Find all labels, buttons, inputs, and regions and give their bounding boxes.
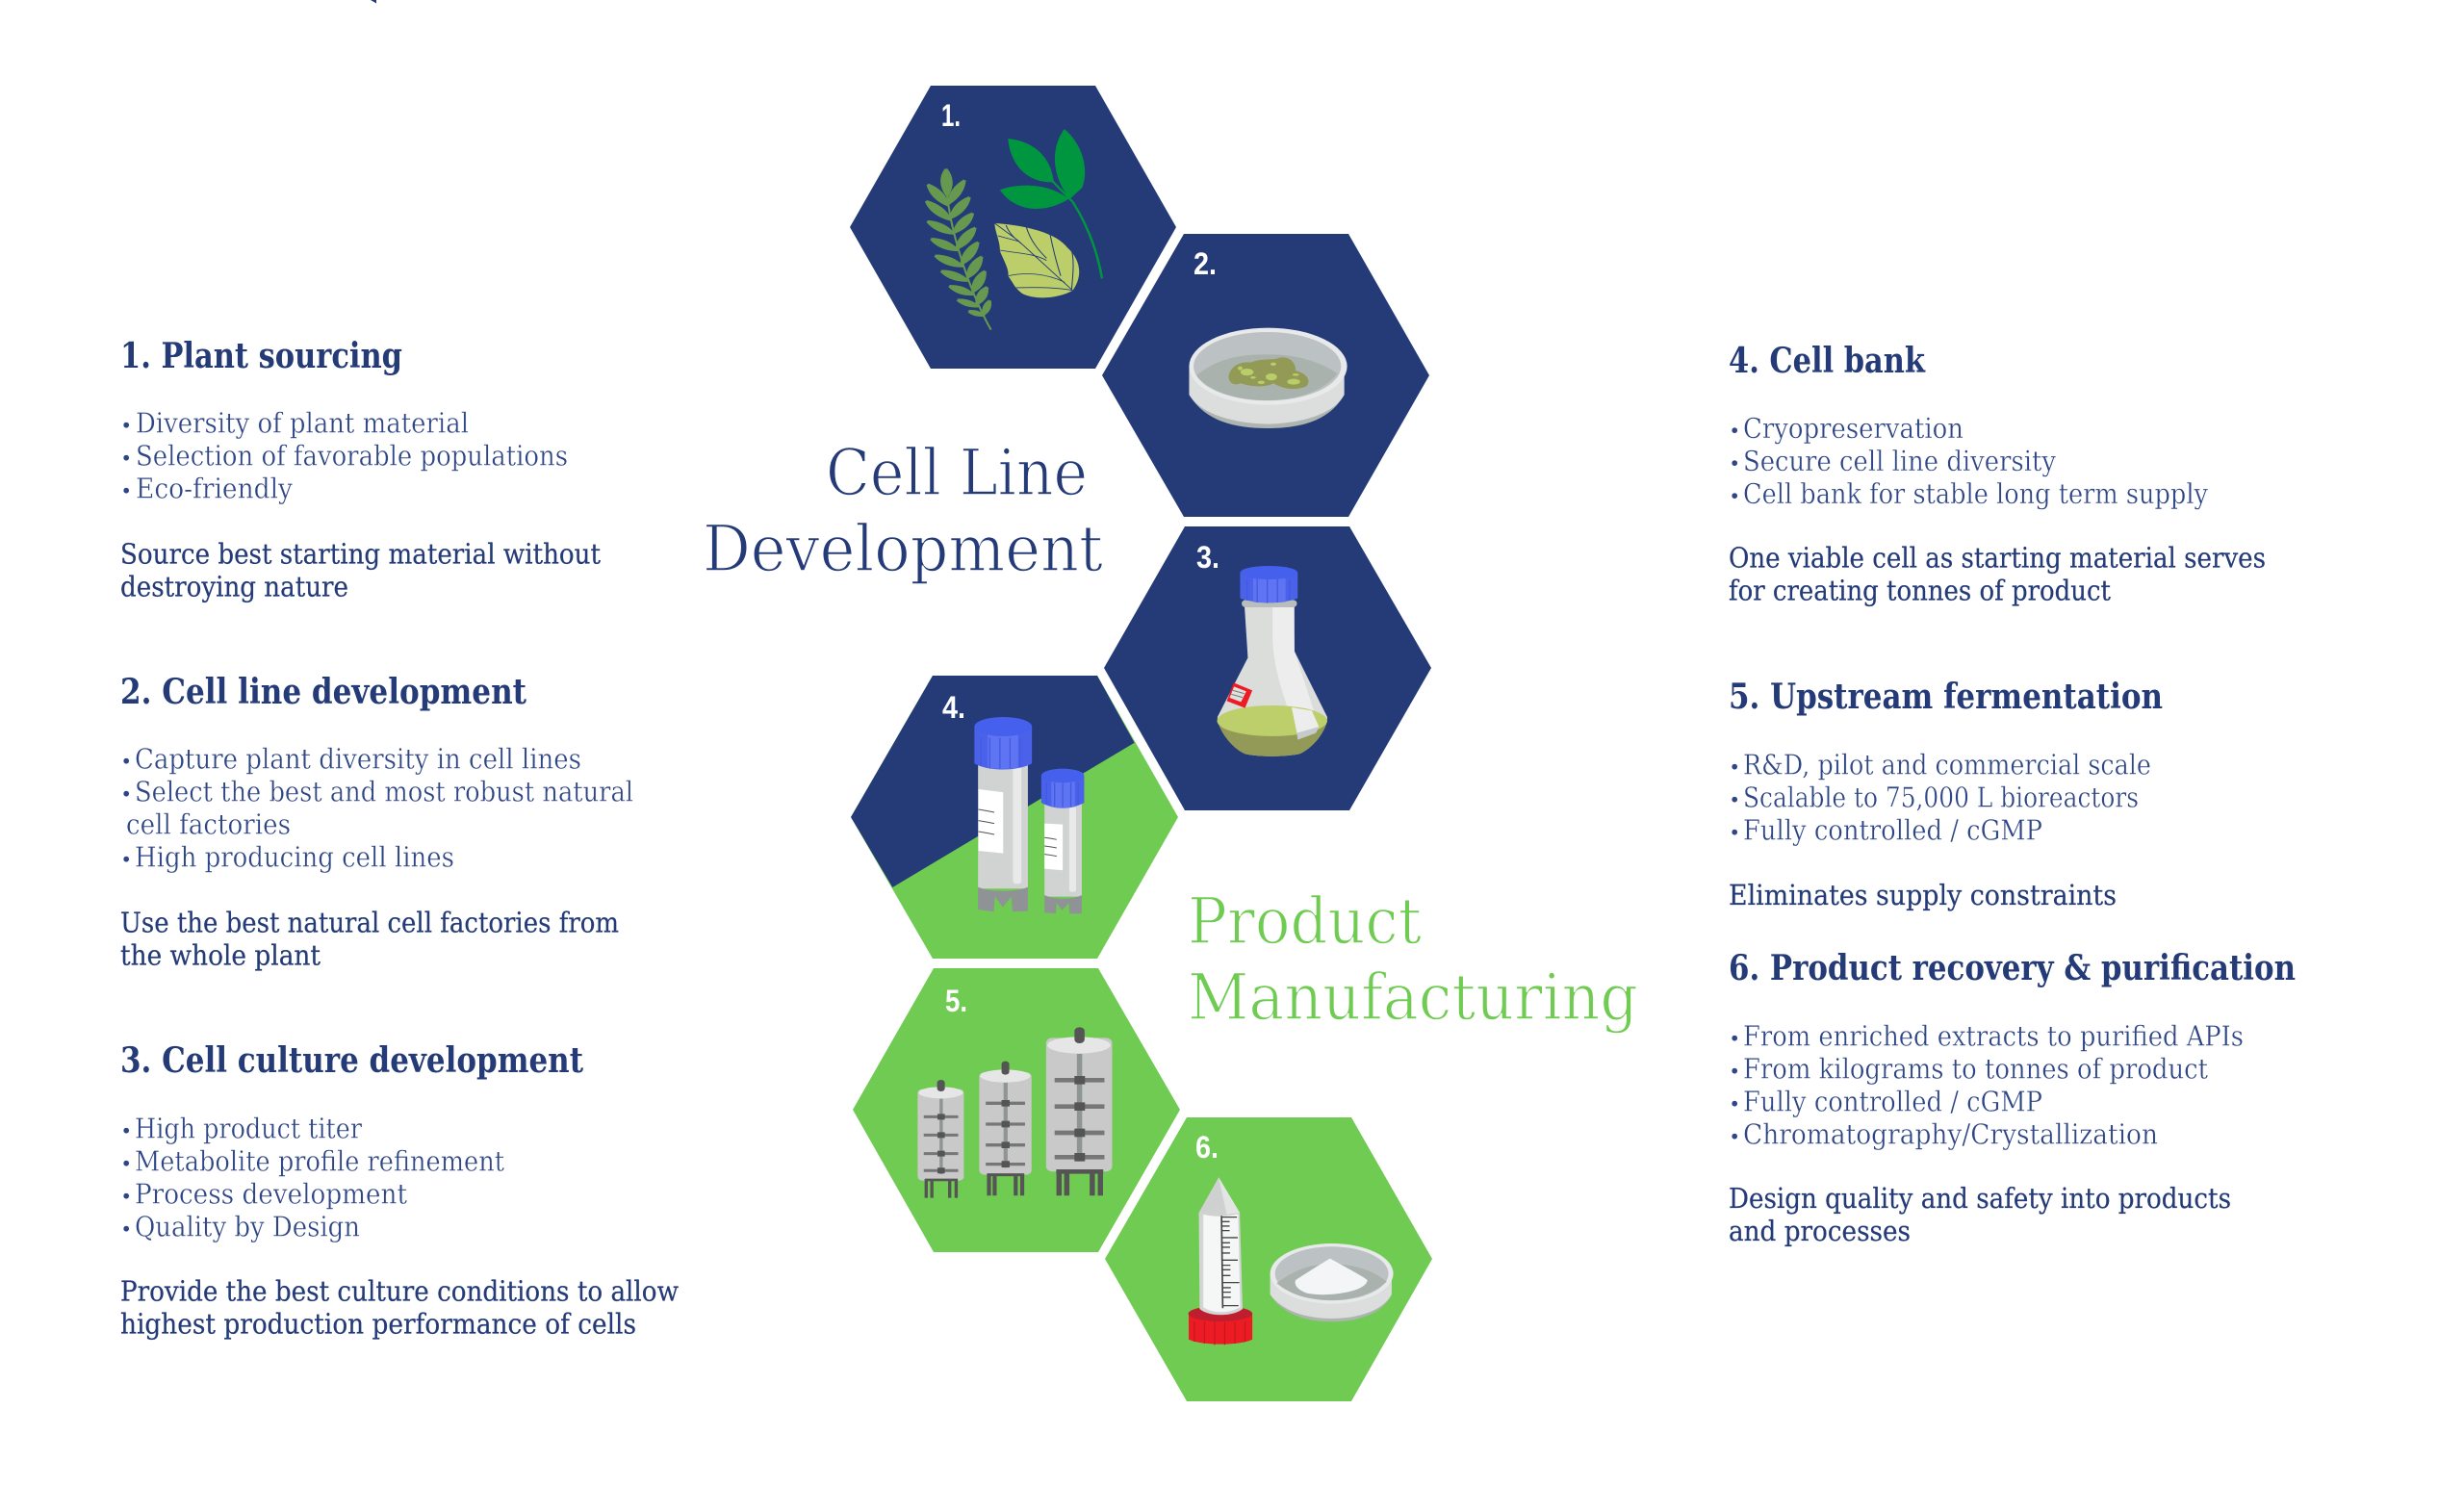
section 6: product recovery and purification: • xyxy=(1729,1061,1740,1084)
title: Product Manufacturing: Product xyxy=(1188,884,1422,959)
section 4: cell bank: Cryopreservation xyxy=(1743,413,1964,445)
section 4: cell bank: 4. Cell bank xyxy=(1729,341,1926,381)
section 3: cell culture development: • xyxy=(120,1120,132,1143)
step number 6: 6. xyxy=(1195,1130,1219,1165)
section 6: product recovery and purification: Design quality and safety into products xyxy=(1729,1183,2231,1215)
icon: conical tube with red cap xyxy=(1189,1177,1252,1345)
section 3: cell culture development: Provide the best culture conditions to allow xyxy=(120,1276,680,1307)
section 6: product recovery and purification: 6. Product recovery & purification xyxy=(1729,948,2296,988)
section 4: cell bank xyxy=(1729,341,2266,606)
hexagon 1: plant sourcing xyxy=(850,86,1176,369)
section 4: cell bank: One viable cell as starting material serves xyxy=(1729,543,2266,574)
icon: cryo tubes xyxy=(974,717,1084,913)
section 6: product recovery and purification: From kilograms to tonnes of product xyxy=(1743,1053,2208,1086)
small tube xyxy=(1041,769,1084,913)
section 1: plant sourcing xyxy=(120,336,601,602)
section 2: cell line development xyxy=(120,672,633,972)
section 1: plant sourcing: • xyxy=(120,447,132,470)
section 6: product recovery and purification: Fully controlled / cGMP xyxy=(1743,1086,2042,1118)
large tube xyxy=(974,717,1032,911)
section 1: plant sourcing: Source best starting material without xyxy=(120,539,601,570)
section 2: cell line development: Capture plant diversity in cell lines xyxy=(135,743,581,776)
section 5: upstream fermentation: • xyxy=(1729,822,1740,845)
section 3: cell culture development: Process development xyxy=(135,1178,407,1211)
hexagon 3: cell culture xyxy=(1104,526,1431,810)
section 3: cell culture development: High product titer xyxy=(135,1113,362,1145)
section 3: cell culture development: highest production performance of cells xyxy=(120,1309,636,1340)
panel: right text column xyxy=(1729,341,2296,1247)
section 2: cell line development: 2. Cell line development xyxy=(120,672,526,712)
title: Product Manufacturing xyxy=(1188,884,1638,1035)
green sprig xyxy=(1000,129,1102,278)
step number 1: 1. xyxy=(941,98,961,133)
step number 4: 4. xyxy=(942,690,965,725)
section 3: cell culture development: Quality by Design xyxy=(135,1211,360,1243)
section 5: upstream fermentation: Eliminates supply constraints xyxy=(1729,880,2117,911)
section 1: plant sourcing: Eco-friendly xyxy=(136,474,294,504)
step number 5: 5. xyxy=(945,984,967,1018)
section 1: plant sourcing: • xyxy=(120,479,132,502)
hexagon 2: cell line xyxy=(1102,234,1429,517)
section 6: product recovery and purification: and processes xyxy=(1729,1216,1911,1247)
section 5: upstream fermentation: • xyxy=(1729,756,1740,780)
section 3: cell culture development: Metabolite profile refinement xyxy=(135,1145,504,1178)
section 6: product recovery and purification: • xyxy=(1729,1093,1740,1116)
section 2: cell line development: • xyxy=(120,783,132,807)
section 3: cell culture development xyxy=(120,1040,680,1340)
section 4: cell bank: • xyxy=(1729,485,1740,508)
hexagon 4: cell bank, split navy and green xyxy=(851,676,1178,959)
section 2: cell line development: Use the best natural cell factories from xyxy=(120,907,619,939)
section 2: cell line development: High producing cell lines xyxy=(135,841,454,874)
section 4: cell bank: • xyxy=(1729,452,1740,475)
icon: petri dish with powder xyxy=(1270,1243,1394,1321)
step number 3: 3. xyxy=(1196,540,1219,575)
section 4: cell bank: • xyxy=(1729,420,1740,443)
hexagon 6: recovery and purification xyxy=(1105,1117,1432,1401)
section 2: cell line development: • xyxy=(120,849,132,872)
section 1: plant sourcing: destroying nature xyxy=(120,572,348,602)
section 5: upstream fermentation: R&D, pilot and commercial scale xyxy=(1743,749,2151,781)
title: Cell Line Development: Cell Line xyxy=(826,436,1088,510)
cropped mark at top edge xyxy=(371,0,376,4)
section 6: product recovery and purification: • xyxy=(1729,1126,1740,1149)
section 2: cell line development: the whole plant xyxy=(120,939,321,972)
icon: petri dish with callus xyxy=(1189,328,1348,428)
section 3: cell culture development: 3. Cell culture development xyxy=(120,1040,583,1081)
section 5: upstream fermentation: Fully controlled / cGMP xyxy=(1743,814,2042,847)
section 6: product recovery and purification: • xyxy=(1729,1028,1740,1051)
icon: plants xyxy=(926,129,1102,330)
section 5: upstream fermentation: 5. Upstream fermentation xyxy=(1729,677,2163,717)
section 5: upstream fermentation: Scalable to 75,000 L bioreactors xyxy=(1743,781,2139,814)
section 1: plant sourcing: 1. Plant sourcing xyxy=(120,336,402,376)
section 3: cell culture development: • xyxy=(120,1153,132,1176)
section 1: plant sourcing: Selection of favorable populations xyxy=(136,441,568,472)
section 5: upstream fermentation xyxy=(1729,677,2163,911)
title: Cell Line Development: Development xyxy=(703,512,1103,586)
section 6: product recovery and purification xyxy=(1729,948,2296,1247)
section 3: cell culture development: • xyxy=(120,1218,132,1242)
small bioreactor xyxy=(917,1080,963,1198)
section 3: cell culture development: • xyxy=(120,1186,132,1209)
hexagon 5: upstream fermentation xyxy=(853,968,1180,1252)
title: Cell Line Development xyxy=(703,436,1103,586)
large bioreactor xyxy=(1046,1027,1112,1195)
section 1: plant sourcing: • xyxy=(120,414,132,437)
section 6: product recovery and purification: Chromatography/Crystallization xyxy=(1743,1118,2158,1151)
panel: left text column xyxy=(120,336,680,1340)
section 2: cell line development: Select the best and most robust natural xyxy=(135,776,633,808)
medium bioreactor xyxy=(979,1062,1032,1195)
section 5: upstream fermentation: • xyxy=(1729,789,1740,812)
icon: bioreactors xyxy=(917,1027,1112,1198)
pale leaf xyxy=(994,223,1079,297)
section 2: cell line development: cell factories xyxy=(126,808,291,841)
section 2: cell line development: • xyxy=(120,751,132,774)
icon: culture flask xyxy=(1217,566,1327,756)
title: Product Manufacturing: Manufacturing xyxy=(1188,961,1638,1035)
fern xyxy=(926,169,991,330)
step number 2: 2. xyxy=(1194,246,1217,281)
section 4: cell bank: Cell bank for stable long term supply xyxy=(1743,478,2209,510)
section 4: cell bank: for creating tonnes of product xyxy=(1729,576,2111,606)
section 4: cell bank: Secure cell line diversity xyxy=(1743,446,2057,477)
section 1: plant sourcing: Diversity of plant material xyxy=(136,408,469,439)
section 6: product recovery and purification: From enriched extracts to purified APIs xyxy=(1743,1020,2244,1053)
